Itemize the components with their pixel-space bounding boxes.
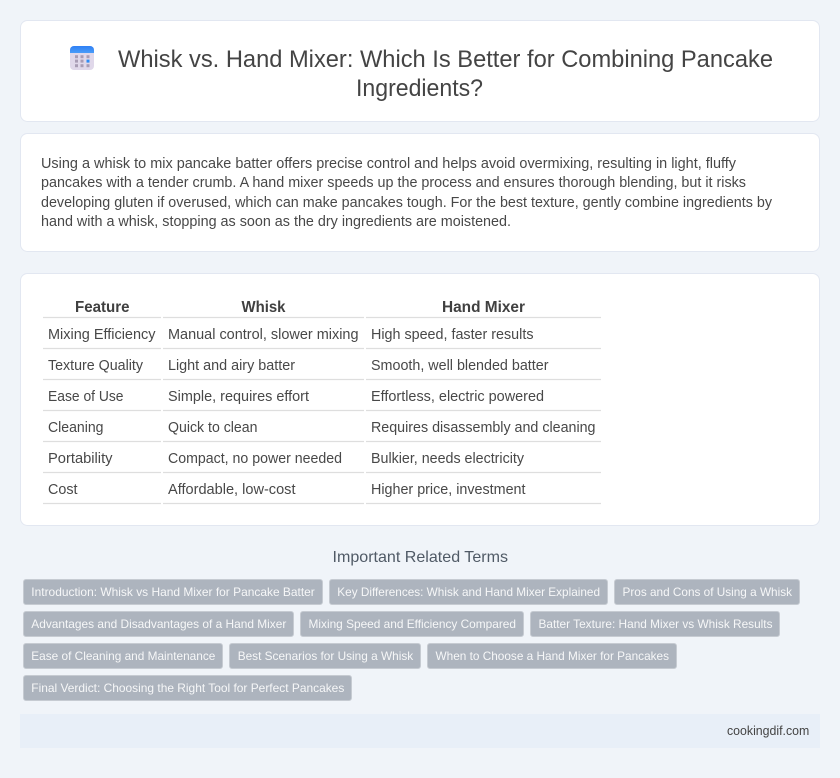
text block: summary paragraph xyxy=(41,156,773,230)
tag xyxy=(330,580,608,604)
text block: summary paragraph: Using a whisk to mix pancake batter offers precise control and helps avoid overmixing, resulting in light, fluffy xyxy=(41,156,737,172)
tag: When to Choose a Hand Mixer for Pancakes xyxy=(436,649,669,663)
row: ease of use xyxy=(48,389,544,405)
table header: Hand Mixer xyxy=(442,299,525,316)
footer xyxy=(20,714,820,748)
row: cleaning: Cleaning xyxy=(48,420,104,436)
row: ease of use: Effortless, electric powered xyxy=(371,389,544,405)
tag: Batter Texture: Hand Mixer vs Whisk Results xyxy=(538,617,772,631)
row: mixing efficiency: Mixing Efficiency xyxy=(48,327,156,343)
tag: Key Differences: Whisk and Hand Mixer Explained xyxy=(337,585,600,599)
panel: title card xyxy=(20,20,820,122)
row: cost: Higher price, investment xyxy=(371,482,526,498)
row: portability: Compact, no power needed xyxy=(168,451,342,467)
row: texture quality: Texture Quality xyxy=(48,358,144,374)
row: cleaning: Requires disassembly and cleaning xyxy=(371,420,596,436)
row: cost: Affordable, low-cost xyxy=(168,482,296,498)
row: texture quality: Smooth, well blended batter xyxy=(371,358,549,374)
panel: intro text xyxy=(20,134,820,252)
row: cost xyxy=(48,482,526,498)
row: texture quality xyxy=(48,358,549,374)
tag xyxy=(24,612,294,636)
panel: related term tags xyxy=(24,580,800,700)
tag xyxy=(24,580,322,604)
tag xyxy=(24,676,352,700)
heading: important related terms: Important Related Terms xyxy=(332,549,508,566)
row: cost: Cost xyxy=(48,482,78,498)
row: portability: Bulkier, needs electricity xyxy=(371,451,525,467)
tag xyxy=(614,580,800,604)
tag xyxy=(300,612,524,636)
tag: Best Scenarios for Using a Whisk xyxy=(238,649,414,663)
row: texture quality: Light and airy batter xyxy=(168,358,295,374)
text block: summary paragraph: hand with a whisk, stopping as soon as the dry ingredients are moistened. xyxy=(41,214,511,230)
tag: Ease of Cleaning and Maintenance xyxy=(31,649,216,663)
tag: Introduction: Whisk vs Hand Mixer for Pancake Batter xyxy=(31,585,315,599)
row: mixing efficiency: Manual control, slower mixing xyxy=(168,327,358,343)
title: Ingredients? xyxy=(356,75,483,102)
tag: Final Verdict: Choosing the Right Tool for Perfect Pancakes xyxy=(31,681,344,695)
row: ease of use: Ease of Use xyxy=(48,389,124,405)
row: portability xyxy=(48,451,525,467)
table header: Feature xyxy=(75,299,130,316)
row: mixing efficiency: High speed, faster results xyxy=(371,327,534,343)
tag xyxy=(428,644,676,668)
tag: Mixing Speed and Efficiency Compared xyxy=(308,617,516,631)
row: ease of use: Simple, requires effort xyxy=(168,389,309,405)
footer: cookingdif.com xyxy=(727,724,809,738)
tag xyxy=(24,644,222,668)
text block: summary paragraph: developing gluten if overused, which can make pancakes tough. For the best texture, gently combine ingredients by xyxy=(41,195,773,211)
row: cleaning xyxy=(48,420,596,436)
row: cleaning: Quick to clean xyxy=(168,420,258,436)
title: Whisk vs. Hand Mixer: Which Is Better for Combining Pancake xyxy=(118,46,773,73)
tag: Advantages and Disadvantages of a Hand Mixer xyxy=(31,617,286,631)
row: portability: Portability xyxy=(48,451,113,467)
table header: Whisk xyxy=(242,299,286,316)
text block: summary paragraph: pancakes with a tender crumb. A hand mixer speeds up the process and ensures thorough blending, but it risks xyxy=(41,175,746,191)
row: mixing efficiency xyxy=(48,327,534,343)
panel: comparison table xyxy=(20,274,820,526)
tag xyxy=(230,644,420,668)
tag: Pros and Cons of Using a Whisk xyxy=(622,585,793,599)
icon: calendar xyxy=(70,46,94,70)
tag xyxy=(530,612,780,636)
table header xyxy=(75,299,525,316)
title xyxy=(118,46,773,102)
